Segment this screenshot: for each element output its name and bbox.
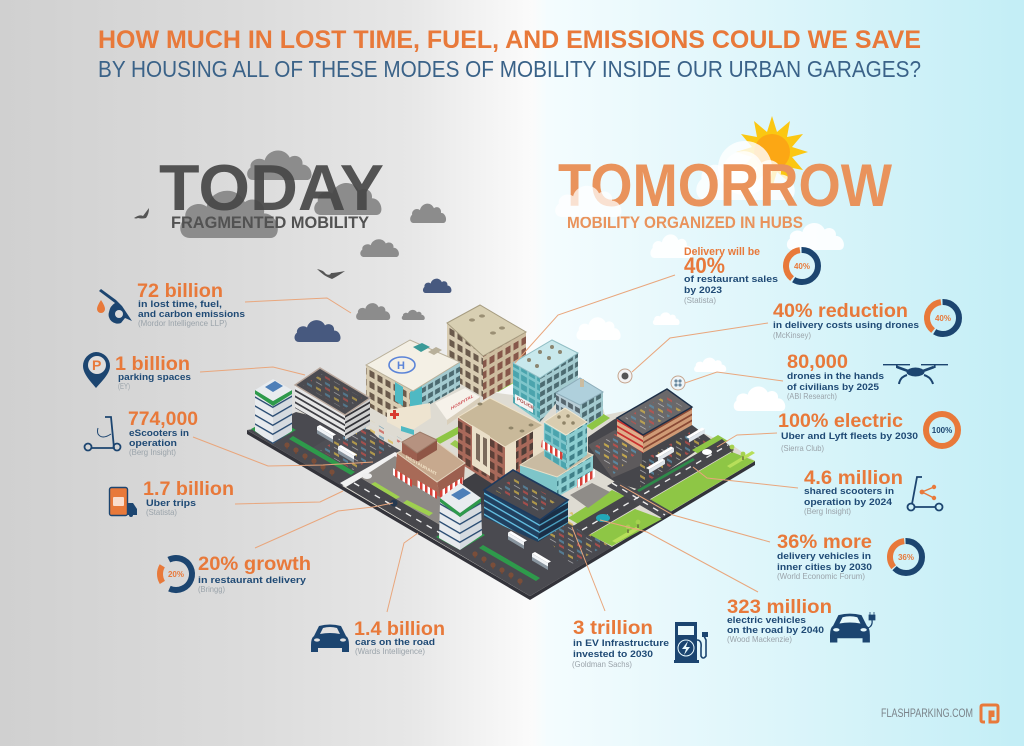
icon: phone with truck	[110, 488, 137, 517]
today word: TODAY	[159, 151, 384, 224]
text: 40% reduction: 40% reduction	[773, 300, 908, 322]
icon: shared scooter	[908, 477, 942, 510]
tomorrow word: TOMORROW	[558, 152, 892, 219]
isometric city	[247, 305, 755, 600]
stat: 36% more: (World Economic Forum)	[777, 571, 865, 581]
stat: 36% more	[777, 531, 928, 581]
building: police: POLICE	[517, 396, 535, 412]
stat: 4.6 million: shared scooters in	[804, 486, 894, 497]
stat: 4.6 million	[804, 467, 942, 516]
donut: 40%	[920, 295, 966, 341]
stat: delivery 40% of restaurant sales: (Statista)	[684, 295, 716, 305]
stat: 1 billion: parking spaces	[118, 372, 191, 383]
stat: 100% electric	[778, 410, 958, 453]
white clouds	[576, 141, 844, 411]
building: hospital annex	[387, 388, 480, 435]
title line 2: BY HOUSING ALL OF THESE MODES OF MOBILITY INSIDE OUR URBAN GARAGES?	[98, 56, 921, 82]
stat: 1.7 billion: (Statista)	[146, 507, 177, 517]
stat: 3 trillion: invested to 2030	[573, 649, 653, 660]
stat: 36% more: inner cities by 2030	[777, 562, 872, 573]
building: navy garage	[484, 470, 568, 542]
stat: 1 billion	[83, 352, 191, 391]
footer brand	[881, 705, 998, 722]
building: centre tower	[436, 483, 485, 550]
icon: bats	[134, 208, 345, 279]
text: delivery 40%: Delivery will be	[684, 246, 760, 258]
text: 80,000: 80,000	[787, 351, 848, 373]
city ground	[247, 370, 755, 600]
stat: 774,000: operation	[129, 438, 177, 449]
donut: 36%: 36%	[898, 553, 914, 562]
icon: charging station	[674, 622, 708, 663]
donut: 40%: 40%	[935, 314, 951, 323]
text: 1 billion: 1 billion	[115, 353, 190, 375]
stat: 323 million: on the road by 2040	[727, 625, 824, 636]
text: 100% electric: 100% electric	[778, 410, 903, 432]
stat: delivery 40% of restaurant sales: of restaurant sales	[684, 274, 778, 285]
stat: 72 billion: and carbon emissions	[138, 309, 245, 320]
text: 1.7 billion: 1.7 billion	[143, 478, 234, 500]
stat: 1.4 billion	[311, 618, 445, 656]
stat: 774,000: eScooters in	[129, 428, 189, 439]
stat: 72 billion: in lost time, fuel,	[138, 299, 222, 310]
cloud over T of tomorrow	[555, 186, 621, 217]
stat: 1.4 billion: (Wards Intelligence)	[355, 646, 425, 656]
icon: drone	[883, 364, 948, 384]
building: grey garage	[295, 368, 370, 440]
building: restaurant	[393, 432, 465, 499]
icon: sun	[736, 116, 808, 188]
building: restaurant: RESTAURANT	[406, 454, 437, 478]
heading: today	[159, 151, 384, 232]
building: beige tower	[447, 305, 526, 400]
stat: 3 trillion	[572, 617, 708, 669]
title line 1: HOW MUCH IN LOST TIME, FUEL, AND EMISSIONS COULD WE SAVE	[98, 26, 921, 54]
icon: car	[311, 624, 349, 652]
building: hospital	[366, 340, 460, 432]
stat: 1.7 billion	[110, 478, 234, 517]
stat: 80,000 drones	[787, 351, 948, 401]
icon: electric car	[830, 612, 875, 642]
tomorrow subtitle: MOBILITY ORGANIZED IN HUBS	[567, 214, 803, 232]
text: 774,000: 774,000	[128, 408, 198, 430]
text: 36% more: 36% more	[777, 531, 872, 553]
text: 20% growth: 20% growth	[198, 553, 311, 575]
building: teal shop podium	[520, 440, 595, 497]
stat: 1.7 billion: Uber trips	[146, 498, 196, 509]
stat: 72 billion: (Mordor Intelligence LLP)	[138, 318, 227, 328]
stat: 80,000 drones: drones in the hands	[787, 371, 884, 382]
stat: 3 trillion: in EV Infrastructure	[573, 638, 669, 649]
donut: 40%: 40%	[794, 262, 810, 271]
icon: e-scooter	[84, 417, 120, 450]
stat: 80,000 drones: (ABI Research)	[787, 391, 837, 401]
text: 1.4 billion: 1.4 billion	[354, 618, 445, 640]
donut: 20%: 20%	[168, 570, 184, 579]
text: 4.6 million: 4.6 million	[804, 467, 903, 489]
donut: 36%	[884, 535, 928, 579]
stat: 1.4 billion: cars on the road	[355, 637, 435, 648]
stat: 1 billion: (EY)	[118, 381, 130, 391]
donut: 100%	[926, 414, 958, 446]
stat: 323 million	[727, 596, 875, 644]
stat: 3 trillion: (Goldman Sachs)	[572, 659, 632, 669]
stat: 774,000: (Berg Insight)	[129, 447, 176, 457]
today subtitle: FRAGMENTED MOBILITY	[171, 214, 369, 232]
flashparking logo	[981, 705, 998, 722]
stat: 323 million: electric vehicles	[727, 615, 806, 626]
stat: 100% electric: Uber and Lyft fleets by 2030	[781, 431, 918, 442]
heading: tomorrow	[558, 152, 892, 232]
green hedges and trees	[284, 436, 540, 585]
donut: 100%: 100%	[932, 426, 952, 435]
stat: 72 billion	[97, 280, 245, 328]
delivery drones	[618, 369, 685, 390]
text: 72 billion: 72 billion	[137, 280, 223, 302]
vehicles	[317, 425, 712, 570]
stat: 80,000 drones: of civilians by 2025	[787, 382, 880, 393]
building: hospital: H	[397, 360, 405, 372]
stat: 100% electric: (Sierra Club)	[781, 443, 824, 453]
building: courthouse	[458, 398, 543, 492]
stat: delivery 40% of restaurant sales: by 2023	[684, 285, 722, 296]
stat: 323 million: (Wood Mackenzie)	[727, 634, 792, 644]
building: police annex	[556, 378, 603, 430]
icon: fuel nozzle	[97, 289, 132, 324]
website: FLASHPARKING.COM	[881, 708, 973, 720]
stat: 4.6 million: operation by 2024	[804, 497, 893, 508]
donut: 20%	[154, 552, 198, 596]
stat: 40% reduction	[773, 295, 966, 341]
stat: 40% reduction: (McKinsey)	[773, 330, 811, 340]
text: 3 trillion: 3 trillion	[573, 617, 653, 639]
stat: 20% growth: in restaurant delivery	[198, 575, 307, 586]
stat: delivery 40% of restaurant sales	[684, 243, 825, 305]
road markings	[354, 445, 728, 533]
building: hospital annex: HOSPITAL	[451, 393, 473, 412]
building: teal tower	[541, 408, 587, 470]
stat: 20% growth	[154, 552, 311, 596]
stat: 4.6 million: (Berg Insight)	[804, 506, 851, 516]
leader lines	[193, 275, 798, 612]
building: red garage	[617, 389, 692, 453]
stat: 20% growth: (Bringg)	[198, 584, 225, 594]
title	[98, 26, 921, 82]
building: left tower	[251, 379, 296, 444]
donut: 40%	[779, 243, 825, 289]
stat: 40% reduction: in delivery costs using drones	[773, 320, 919, 331]
icon: parking pin: P	[92, 357, 101, 373]
stat: 774,000	[84, 408, 198, 457]
storm clouds	[180, 150, 451, 342]
stat: delivery 40% of restaurant sales: 40%	[684, 253, 725, 278]
text: 323 million: 323 million	[727, 596, 832, 618]
building: police	[513, 340, 578, 422]
stat: 36% more: delivery vehicles in	[777, 551, 871, 562]
